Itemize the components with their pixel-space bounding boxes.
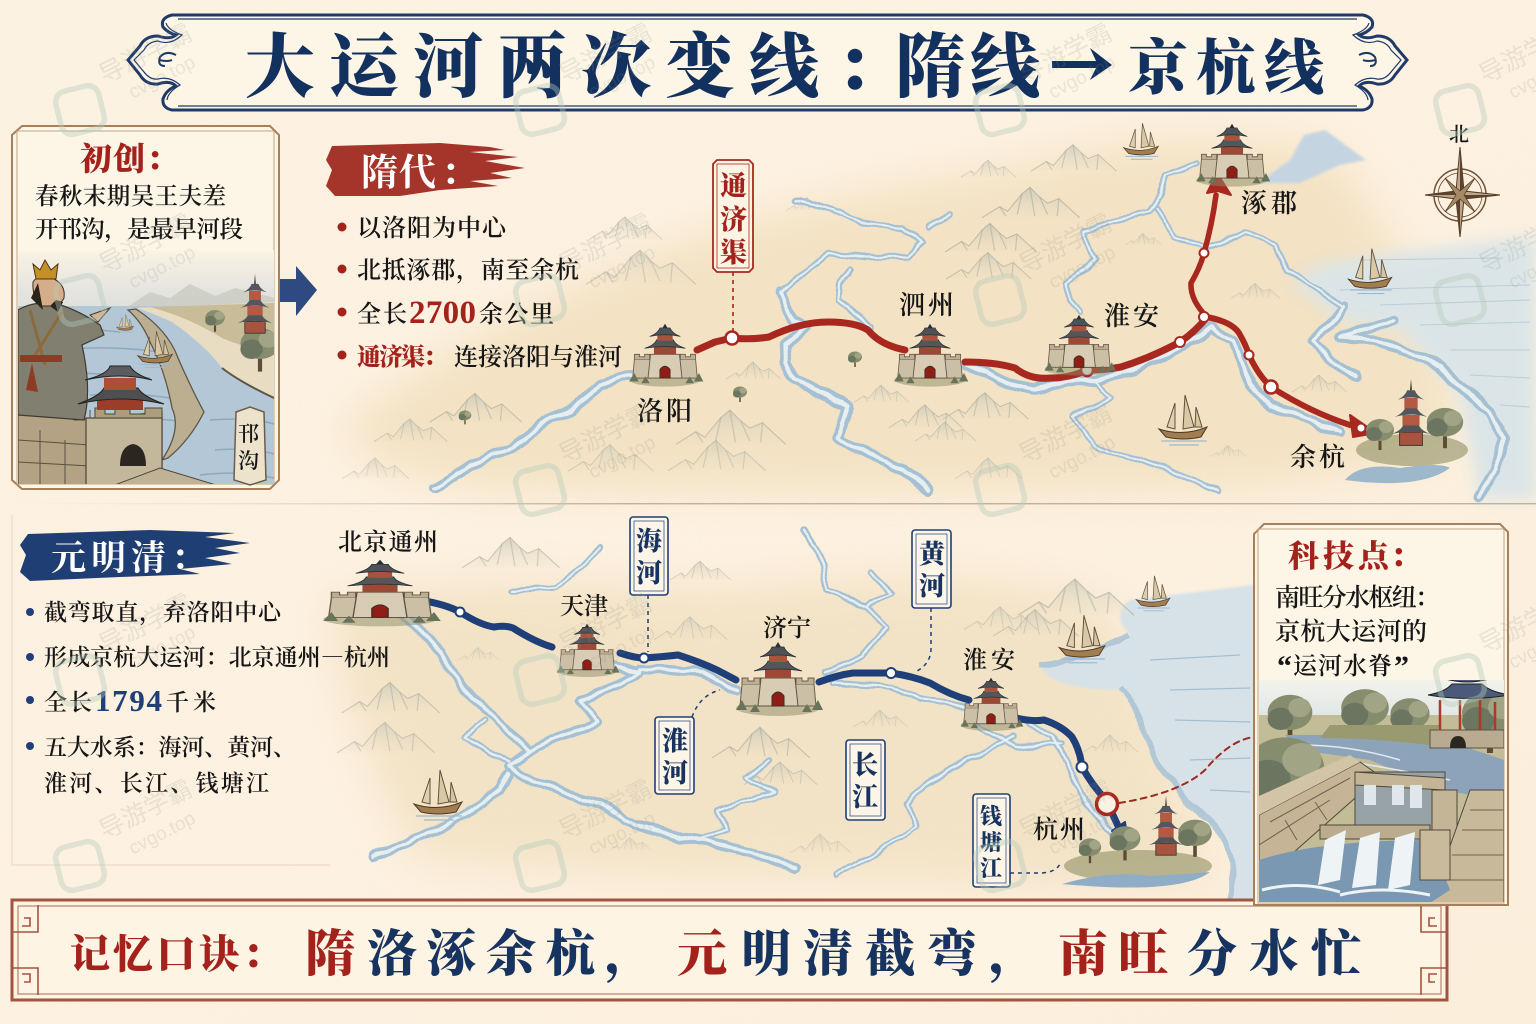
- city: 余杭: [1290, 379, 1468, 483]
- panel: 科技点: [1246, 524, 1518, 905]
- title text: 大运河两次变线: [245, 11, 833, 112]
- mnemonic label: 记忆口诀：: [70, 923, 285, 980]
- panel outline: 元明清 text area: [12, 515, 330, 865]
- title text: [245, 11, 1332, 112]
- bullet: 全长1794千米: 全长: [44, 684, 92, 717]
- banner: 元明清: ：: [171, 531, 206, 581]
- banner: 元明清: [20, 530, 250, 581]
- illustration: 南旺 sluice: [1259, 680, 1504, 902]
- rivers: lower map: [373, 530, 1125, 873]
- text: 科技点 description: 京杭大运河的: [1275, 612, 1427, 648]
- label: 钱塘江: 江: [980, 852, 1002, 883]
- city: 洛阳: 洛阳: [637, 391, 692, 428]
- bullet: 以洛阳为中心: 以洛阳为中心: [357, 208, 508, 243]
- city: 淮安 (Sui): [1045, 296, 1160, 376]
- city: 北京通州: 北京通州: [338, 522, 438, 557]
- lock walls: [1259, 762, 1374, 860]
- Sui canal route: [697, 173, 1376, 437]
- label: 钱塘江: 钱: [980, 800, 1002, 831]
- label: 邗沟: [234, 407, 266, 485]
- wall: [18, 411, 163, 484]
- label: 邗沟: 邗: [238, 418, 259, 448]
- text: 初创 description: 开邗沟，是最早河段: [35, 210, 244, 244]
- text: 科技点 description: 南旺分水枢纽：: [1275, 578, 1440, 614]
- city: 淮安 (Sui): 淮安: [1104, 296, 1160, 333]
- label: 通济渠: 济: [720, 198, 747, 237]
- label: 通济渠: [713, 160, 753, 334]
- list: 隋代 key points: [338, 208, 622, 372]
- gate tower: [97, 400, 143, 410]
- title text: ：: [835, 11, 905, 112]
- water: [1259, 840, 1450, 903]
- king: [18, 303, 104, 420]
- bullet: 全长1794千米: 1794: [95, 683, 162, 718]
- rivers: Sui map: [435, 163, 1505, 495]
- label: 黄河: [912, 530, 951, 672]
- city: 涿郡: [1196, 124, 1297, 220]
- city: 泗州: 泗州: [899, 285, 954, 322]
- bullet: 全长2700余公里: 全长: [357, 294, 407, 329]
- title text: 隋线: [895, 11, 1045, 112]
- banner: 隋代: ：: [441, 142, 478, 196]
- pavilion: [1430, 730, 1504, 748]
- city: 淮安 (Jinghang): [961, 640, 1023, 731]
- city: 泗州: [894, 285, 968, 387]
- title banner: [128, 11, 1407, 112]
- mnemonic text: 明清截弯，: [741, 914, 1051, 986]
- bullet: 北抵涿郡: 北抵涿郡，南至余杭: [357, 250, 579, 285]
- city: 杭州: [1033, 796, 1212, 888]
- label: 黄河: 黄: [919, 534, 949, 571]
- compass: [1425, 118, 1500, 237]
- bullet: 全长1794千米: 千米: [166, 684, 216, 717]
- text: 科技点 description: 运河水脊: [1293, 646, 1393, 681]
- text: 科技点 description: [1275, 578, 1440, 683]
- city: 淮安 (Jinghang): 淮安: [963, 640, 1016, 675]
- city: 天津: [557, 586, 619, 677]
- label: 通济渠: 渠: [720, 231, 747, 270]
- label: 长江: [846, 740, 885, 820]
- bullet: 通济渠: [338, 337, 622, 372]
- heading: 科技点: 科技点: [1288, 531, 1393, 576]
- label: 钱塘江: 塘: [980, 826, 1002, 857]
- bullet: 五大水系: 淮河、长江、钱塘江: [44, 765, 269, 798]
- mnemonic text: 南旺: [1058, 914, 1178, 986]
- map: upper Sui dynasty terrain: [340, 130, 1536, 500]
- compass: 北: [1449, 118, 1469, 147]
- illustration: 吴王 and 邗沟: [18, 250, 280, 488]
- mnemonic text: [305, 914, 1373, 986]
- bullet: 全长2700余公里: [338, 294, 554, 331]
- ships: Sui map: [1124, 123, 1392, 445]
- title text: 京杭线: [1128, 21, 1332, 107]
- bullet: 全长1794千米: [26, 683, 216, 718]
- mnemonic text: 洛涿余杭，: [367, 914, 664, 986]
- text: 初创 description: [35, 177, 244, 244]
- city: 济宁: 济宁: [763, 608, 811, 643]
- heading: 科技点: ：: [1390, 531, 1421, 576]
- city: 洛阳: [629, 324, 703, 428]
- text: 科技点 description: ”: [1394, 650, 1409, 683]
- banner: 隋代: [326, 142, 525, 196]
- text: 初创 description: 春秋末期吴王夫差: [35, 177, 226, 211]
- bullet: 全长2700余公里: 余公里: [479, 294, 554, 329]
- bullet: 截弯取直: 截弯取直，弃洛阳中心: [44, 594, 283, 627]
- city: 北京通州: [323, 522, 441, 626]
- label: 长江: 长: [852, 745, 878, 782]
- panel: 初创: [12, 126, 280, 489]
- arrow: 隋线 to 京杭线: [1052, 48, 1112, 80]
- label: 海河: [630, 517, 668, 652]
- banner: 隋代: 隋代: [361, 142, 437, 196]
- arrow: 初创 to 隋代: [280, 266, 317, 316]
- city: 天津: 天津: [560, 586, 608, 621]
- text: 科技点 description: “: [1277, 650, 1292, 683]
- bullet: 全长2700余公里: 2700: [409, 295, 476, 331]
- heading: 初创: 初创: [80, 134, 146, 180]
- city: 杭州: 杭州: [1033, 810, 1085, 846]
- bullet: 五大水系: 五大水系：海河、黄河、: [44, 729, 296, 762]
- label: 黄河: 河: [919, 566, 945, 603]
- ships: lower map: [414, 576, 1170, 820]
- label: 淮河: 淮: [662, 721, 688, 758]
- label: 海河: 海: [636, 521, 662, 558]
- heading: 初创: [80, 134, 178, 180]
- label: 长江: 江: [852, 777, 878, 814]
- bullet: 通济渠: 通济渠：: [357, 337, 447, 372]
- map: lower Yuan-Ming-Qing terrain: [330, 537, 1254, 900]
- bullet: 通济渠: 连接洛阳与淮河: [454, 337, 622, 372]
- label: 海河: 河: [636, 553, 662, 590]
- city: 涿郡: 涿郡: [1241, 183, 1297, 220]
- banner: 元明清: 元明清: [51, 531, 171, 581]
- label: 邗沟: 沟: [238, 445, 259, 475]
- Beijing-Hangzhou canal route: [419, 600, 1254, 842]
- divider: [0, 503, 1536, 504]
- city: 余杭: 余杭: [1290, 437, 1345, 474]
- label: 通济渠: 通: [720, 164, 747, 203]
- label: 钱塘江: [973, 794, 1060, 887]
- label: 淮河: [655, 690, 720, 794]
- label: 淮河: 河: [662, 753, 688, 790]
- heading: 初创: ：: [146, 134, 178, 180]
- mnemonic text: 分水忙: [1187, 914, 1373, 986]
- mnemonic text: 隋: [305, 914, 355, 986]
- bullet: 五大水系: [26, 729, 296, 798]
- mnemonic text: 元: [677, 914, 727, 986]
- bottom mnemonic box: [12, 900, 1447, 1000]
- bullet: 形成京杭大运河: 形成京杭大运河：北京通州—杭州: [44, 639, 390, 672]
- list: 元明清 key points: [26, 594, 390, 798]
- city: 济宁: [736, 608, 823, 716]
